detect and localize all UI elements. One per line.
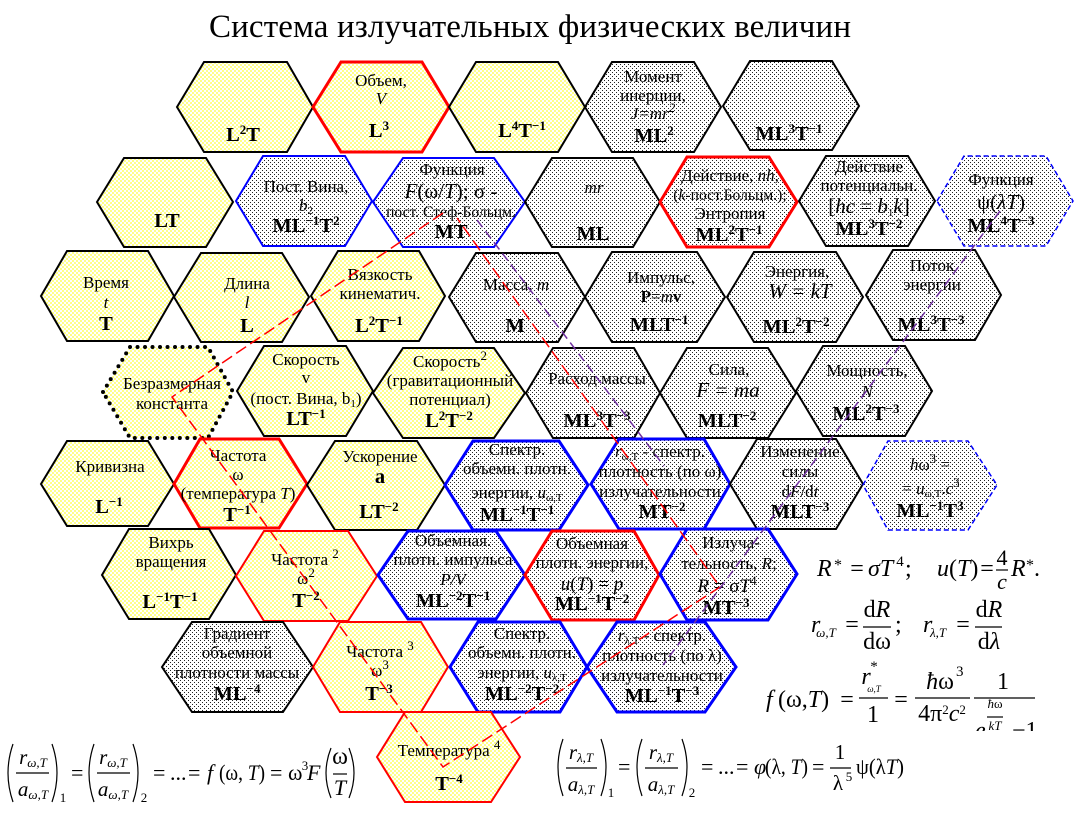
- hexagon: spectral emissivity omega: плотность (по ω): [599, 462, 721, 481]
- formula: Stefan-Boltzmann: *: [834, 557, 842, 574]
- formula: lambda similarity: 1: [835, 740, 845, 764]
- formula: lambda similarity: λ: [833, 771, 844, 795]
- hexagon: frequency: Частота: [210, 446, 267, 465]
- formula: spectral emissivity derivatives: r: [811, 612, 821, 638]
- hexagon: force change: [730, 439, 863, 529]
- formula: Stefan-Boltzmann: [816, 545, 1040, 594]
- hexagon: spectral energy density lambda: энергии, uλ,T: [477, 663, 567, 684]
- hexagon: power: [796, 346, 932, 436]
- hexagon: dimensionless constant: Безразмерная: [123, 374, 221, 393]
- hexagon: time: [41, 251, 174, 341]
- hexagon: dimensionless constant: константа: [136, 394, 208, 413]
- hexagon: velocity squared: [373, 348, 525, 438]
- formula: Planck function: r: [861, 664, 871, 690]
- formula: omega similarity: [8, 744, 354, 805]
- hexagon: volumetric momentum density: ML−2T−1: [416, 588, 490, 612]
- hexagon: spectral energy density omega: энергии, uω,T: [471, 483, 563, 504]
- formula: lambda similarity: rλ,T: [569, 740, 594, 765]
- formula: omega similarity: 3: [302, 758, 308, 773]
- hexagon: function psi: Функция: [968, 170, 1034, 189]
- hexagon: mass density gradient: плотности массы: [175, 663, 300, 682]
- hexagon: time: Время: [83, 273, 129, 292]
- formula: omega similarity: f: [207, 760, 216, 785]
- hexagon: emissivity: R = σT4: [696, 573, 757, 597]
- hexagon: volume: L3: [369, 118, 390, 142]
- hexagon: frequency squared: [236, 531, 377, 621]
- formula: Stefan-Boltzmann: σT: [868, 556, 895, 582]
- formula: spectral emissivity derivatives: r: [923, 612, 933, 638]
- hexagon: frequency squared: ω2: [297, 565, 315, 588]
- hexagon: frequency squared: T−2: [292, 588, 320, 612]
- red dashed cycle line: [172, 213, 720, 767]
- formula: omega similarity: (ω, T): [219, 760, 265, 785]
- formula: lambda similarity: 1: [608, 785, 614, 800]
- hexagon: temperature 4: Температура 4: [398, 737, 501, 760]
- hexagon: ML3T-1: ML3T−1: [755, 121, 823, 145]
- hexagon: dimensionless constant: [103, 347, 233, 438]
- hexagon: potential action: [799, 156, 935, 246]
- hexagon: mass flow: [526, 348, 660, 438]
- formula: Stefan-Boltzmann: R: [816, 556, 832, 582]
- hexagon: action: Действие, nh,: [681, 166, 779, 185]
- hexagon: force change: силы: [782, 462, 819, 481]
- hexagon: action: ML2T−1: [695, 222, 763, 246]
- hexagon: action: [660, 157, 797, 247]
- hexagon: energy flow: Поток: [910, 256, 955, 275]
- hexagon: momentum: MLT−1: [630, 312, 688, 336]
- formula: spectral emissivity derivatives: ω,T: [816, 625, 837, 640]
- hexagon: spectral emissivity lambda: плотность (по λ): [602, 646, 722, 665]
- hexagon: h omega cubed: = uω,T.c3: [902, 475, 960, 500]
- formula: lambda similarity: =: [736, 754, 748, 779]
- formula: Planck function: kT: [988, 718, 1002, 733]
- formula: Planck function: e: [975, 718, 986, 744]
- hexagon: frequency cubed: T−3: [365, 681, 393, 705]
- formula: lambda similarity: aλ,T: [568, 772, 595, 797]
- hexagon: kinematic viscosity: L2T−1: [355, 313, 403, 337]
- hexagon: spectral energy density lambda: Спектр.: [494, 624, 550, 643]
- hexagon: mass flow: Расход массы: [548, 369, 646, 388]
- hexagon: power: N: [860, 382, 874, 401]
- hexagon: vortex: [102, 529, 236, 619]
- hexagon: moment of inertia: [585, 62, 721, 152]
- hexagon: action: (k-пост.Больцм.);: [673, 187, 787, 204]
- hexagon: frequency squared: Частота 2: [271, 546, 339, 569]
- hexagon: spectral emissivity omega: излучательности: [599, 482, 721, 501]
- formula: omega similarity: aω,T: [98, 777, 129, 802]
- hexagon: length: [174, 253, 309, 342]
- hexagon: mass density gradient: объемной: [202, 643, 272, 662]
- hexagon: Wien constant b2: Пост. Вина,: [264, 177, 348, 196]
- hexagon: mass: Масса, m: [483, 275, 549, 294]
- hexagon: volumetric momentum density: P/V: [439, 570, 468, 589]
- hexagon: frequency: [174, 439, 307, 528]
- formula: spectral emissivity derivatives: [811, 597, 1003, 655]
- hexagon: vortex: L−1T−1: [142, 589, 198, 613]
- formula: omega similarity: ...: [170, 760, 186, 785]
- hexagon: volumetric energy density: [525, 531, 659, 620]
- formula: Stefan-Boltzmann: u: [937, 556, 949, 582]
- hexagon: length: Длина: [224, 274, 270, 293]
- hexagon: potential action: Действие: [835, 157, 903, 176]
- formula: lambda similarity: rλ,T: [649, 740, 674, 765]
- formula: lambda similarity: =: [618, 754, 630, 779]
- formula: Planck function: =: [894, 687, 908, 713]
- hexagon: function F: F(ω/T); σ -: [404, 179, 497, 203]
- formula: Stefan-Boltzmann: =: [980, 556, 994, 582]
- formula: lambda similarity: (λ, T): [765, 754, 808, 779]
- formula: spectral emissivity derivatives: =: [845, 612, 859, 638]
- hexagon: mass density gradient: Градиент: [204, 624, 271, 643]
- hexagon: spectral energy density omega: ML−1T−1: [480, 502, 554, 526]
- hexagon: vortex: вращения: [136, 552, 207, 571]
- hexagon: L4T-1: [449, 62, 585, 152]
- hexagon: temperature 4: T−4: [435, 771, 463, 795]
- formula: spectral emissivity derivatives: dλ: [978, 629, 1000, 655]
- hexagon: ML3T-1: [723, 61, 859, 150]
- hexagon: momentum: [585, 252, 725, 342]
- hexagon: volumetric energy density: Объемная: [556, 534, 628, 553]
- hexagon: spectral emissivity omega: rω,T - спектр.: [615, 442, 705, 463]
- hexagon: potential action: ML3T−2: [835, 216, 903, 240]
- hexagon: frequency: T−1: [223, 502, 251, 526]
- formula: omega similarity: =: [71, 760, 83, 785]
- hexagon: volumetric momentum density: Объемная.: [415, 531, 491, 550]
- hexagon: acceleration: [307, 441, 445, 530]
- formula: lambda similarity: =: [701, 754, 713, 779]
- formula: omega similarity: 2: [141, 790, 147, 805]
- hexagon: energy flow: [866, 250, 1001, 340]
- formula: lambda similarity: φ: [754, 754, 766, 779]
- formula: Stefan-Boltzmann: (T): [949, 556, 978, 582]
- hexagon: action: Энтропия: [695, 204, 766, 223]
- hexagon: emissivity: [660, 529, 797, 620]
- purple dashed line from function psi: [663, 211, 1000, 665]
- hexagon: frequency cubed: [313, 622, 448, 712]
- hexagon: spectral emissivity lambda: ML−1T−3: [625, 683, 700, 707]
- hexagon: volumetric energy density: плотн. энергии,: [536, 553, 648, 572]
- hexagon: potential action: [hc = b1k]: [828, 194, 910, 219]
- formula: Stefan-Boltzmann: =: [850, 556, 864, 582]
- hexagon: mr: ML: [576, 223, 610, 245]
- hexagon: acceleration: a: [375, 466, 385, 488]
- hexagon: moment of inertia: ML2: [634, 123, 674, 147]
- formula: lambda similarity: =: [812, 754, 824, 779]
- hexagon: L4T-1: L4T−1: [498, 118, 546, 142]
- hexagon: velocity: (пост. Вина, b1): [250, 389, 362, 410]
- formula: Stefan-Boltzmann: ;: [905, 556, 912, 582]
- hexagon: velocity: Скорость: [272, 350, 340, 369]
- formula: omega similarity: ω: [288, 760, 302, 785]
- hexagon: momentum: Импульс,: [627, 268, 695, 287]
- hexagon: function F: MT: [434, 221, 468, 243]
- formula: Planck function: f: [766, 687, 776, 713]
- hexagon: velocity squared: (гравитационный: [387, 371, 513, 390]
- formula: omega similarity: T: [334, 775, 348, 800]
- hexagon: spectral energy density lambda: ML−2T−2: [485, 681, 559, 705]
- hexagon: volumetric energy density: u(T) = p: [561, 574, 623, 595]
- hexagon: L2T: [177, 62, 313, 152]
- hexagon: mass flow: ML3T−3: [563, 408, 631, 432]
- hexagon: power: ML2T−3: [832, 401, 900, 425]
- hexagon: mr: [525, 158, 660, 247]
- hexagon: mr: mr: [585, 178, 604, 197]
- hexagon: h omega cubed: [863, 441, 997, 530]
- hexagon: energy: ML2T−2: [762, 314, 830, 338]
- hexagon: volumetric momentum density: [378, 531, 525, 619]
- hexagon: function psi: ψ(λT): [977, 190, 1025, 214]
- hexagon: frequency cubed: ω3: [371, 657, 389, 680]
- hexagon: energy flow: энергии: [903, 275, 961, 294]
- formula: Planck function: 3: [956, 664, 964, 680]
- formula: omega similarity: rω,T: [99, 745, 128, 770]
- formula: omega similarity: F: [306, 760, 321, 785]
- hexagon: potential action: потенциальн.: [821, 176, 917, 195]
- hexagon: emissivity: MT−3: [703, 595, 750, 619]
- hexagon: h omega cubed: hω3 =: [910, 451, 950, 474]
- formula: omega similarity: aω,T: [18, 777, 49, 802]
- hexagon: volume: Объем,: [355, 71, 407, 90]
- hexagon: Wien constant b2: [236, 156, 372, 246]
- hexagon: length: l: [245, 293, 250, 312]
- hexagon: moment of inertia: Момент: [624, 67, 682, 86]
- formula: lambda similarity: 2: [689, 785, 695, 800]
- hexagon: kinematic viscosity: кинематич.: [339, 284, 421, 303]
- formula: Planck function: ħω: [926, 669, 954, 695]
- formula: spectral emissivity derivatives: dR: [864, 597, 891, 623]
- hexagon: function F: Функция: [419, 160, 485, 179]
- formula: Planck function: ω,T: [867, 684, 882, 694]
- formula: spectral emissivity derivatives: =: [956, 612, 970, 638]
- formula: spectral emissivity derivatives: dR: [976, 597, 1003, 623]
- hexagon: acceleration: LT−2: [359, 499, 399, 523]
- hexagon: volumetric momentum density: плотн. импульса: [393, 550, 513, 569]
- formula: Planck function: −1: [1012, 718, 1038, 744]
- hexagon: velocity squared: Скорость2: [413, 348, 487, 371]
- hexagon: function F: пост. Стеф-Больцм.: [386, 204, 516, 221]
- hexagon: emissivity: Излуча-: [702, 533, 760, 552]
- hexagon: spectral emissivity lambda: излучательности: [601, 666, 723, 685]
- formula: Stefan-Boltzmann: *: [1026, 557, 1034, 574]
- formula: lambda similarity: [558, 739, 904, 800]
- formula: Planck function: ħω: [987, 696, 1003, 711]
- hexagon: function psi: ML4T−3: [967, 213, 1035, 237]
- hexagon: function F: [373, 158, 525, 247]
- hexagon: mass: [449, 253, 585, 342]
- hexagon: spectral energy density lambda: объемн. плотн.: [468, 643, 576, 662]
- hexagon: temperature 4: [377, 712, 520, 802]
- formula: omega similarity: =: [188, 760, 200, 785]
- hexagon: force: F = ma: [695, 378, 760, 402]
- hexagon: energy: Энергия,: [765, 262, 829, 281]
- formula: omega similarity: ω: [332, 744, 348, 770]
- hexagon: Wien constant b2: b2: [299, 196, 313, 217]
- hexagon: spectral emissivity lambda: rλ,T - спектр.: [618, 626, 706, 647]
- hexagon: moment of inertia: J=mr2: [631, 100, 676, 123]
- formula: omega similarity: =: [153, 760, 165, 785]
- hexagon: L2T: L2T: [226, 122, 260, 146]
- formula: spectral emissivity derivatives: dω: [863, 629, 891, 655]
- hexagon: acceleration: Ускорение: [342, 447, 418, 466]
- purple dashed line from function F: [477, 220, 664, 466]
- hexagon: LT: [97, 158, 233, 247]
- hexagon: moment of inertia: инерции,: [620, 86, 686, 105]
- formula: omega similarity: =: [270, 760, 282, 785]
- hexagon: curvature: Кривизна: [75, 457, 145, 476]
- formula: lambda similarity: aλ,T: [648, 772, 675, 797]
- hexagon: kinematic viscosity: Вязкость: [348, 265, 413, 284]
- hexagon: energy flow: ML3T−3: [897, 312, 965, 336]
- hexagon: volume: V: [376, 89, 389, 108]
- formula: lambda similarity: ...: [718, 754, 734, 779]
- hexagon: velocity: LT−1: [286, 406, 326, 430]
- hexagon: energy: W = kT: [768, 279, 833, 303]
- formula: spectral emissivity derivatives: ;: [895, 612, 902, 638]
- formula: Planck function: 1: [997, 669, 1009, 695]
- hexagon: spectral energy density omega: Спектр.: [489, 440, 545, 459]
- hexagon: momentum: P=mv: [641, 287, 682, 306]
- hexagon: function psi: [937, 156, 1073, 246]
- hexagon: volume: [313, 62, 449, 152]
- formula: omega similarity: 1: [60, 790, 66, 805]
- hexagon: spectral emissivity omega: [591, 439, 730, 529]
- hexagon: force: Сила,: [709, 360, 749, 379]
- hexagon: curvature: L−1: [95, 494, 123, 518]
- hexagon: velocity squared: потенциал): [409, 390, 491, 409]
- hexagon: force change: MLT−3: [771, 499, 830, 523]
- hexagon: force: MLT−2: [698, 408, 756, 432]
- hexagon: length: L: [240, 315, 254, 337]
- hexagon: frequency: (температура T): [181, 484, 295, 503]
- formula: Stefan-Boltzmann: 4: [896, 554, 904, 570]
- hexagon: spectral energy density omega: [445, 440, 588, 530]
- formula: Stefan-Boltzmann: 4: [996, 545, 1008, 570]
- hexagon: mass density gradient: ML−4: [214, 681, 261, 705]
- formula: omega similarity: rω,T: [19, 745, 48, 770]
- title: Система излучательных физических величин: [209, 9, 851, 45]
- hexagon: vortex: Вихрь: [148, 533, 194, 552]
- formula: lambda similarity: ψ(λT): [856, 754, 904, 779]
- hexagon: spectral emissivity omega: MT−2: [639, 499, 685, 523]
- hexagon: mass density gradient: [162, 622, 313, 712]
- hexagon: force change: Изменение: [760, 442, 840, 461]
- formula: lambda similarity: 5: [846, 769, 852, 784]
- hexagon: LT: LT: [154, 210, 180, 232]
- formula: Planck function: 4π2c2: [918, 701, 966, 727]
- hexagon: force change: dF/dt: [782, 482, 820, 501]
- formula: Stefan-Boltzmann: c: [997, 569, 1007, 594]
- hexagon: kinematic viscosity: [311, 251, 445, 341]
- hexagon: velocity: [237, 346, 373, 436]
- formula: Planck function: 1: [867, 702, 879, 728]
- hexagon: mass: M: [505, 315, 525, 337]
- formula: Planck function: [766, 662, 1035, 731]
- formula: Planck function: *: [870, 659, 878, 675]
- formula: Planck function: =: [840, 687, 854, 713]
- hexagon: spectral emissivity lambda: [587, 622, 736, 712]
- formula: spectral emissivity derivatives: λ,T: [929, 625, 947, 640]
- hexagon: power: Мощность,: [826, 361, 908, 380]
- hexagon: frequency: ω: [232, 465, 244, 484]
- hexagon: velocity: v: [302, 368, 311, 387]
- hexagon: spectral energy density lambda: [450, 622, 587, 712]
- hexagon: energy: [727, 252, 863, 342]
- hexagon: velocity squared: L2T−2: [425, 408, 473, 432]
- formula: Stefan-Boltzmann: .: [1034, 556, 1040, 582]
- hexagon: spectral energy density omega: объемн. плотн.: [463, 459, 571, 478]
- formula: Planck function: (ω,T): [778, 687, 829, 713]
- hexagon: h omega cubed: ML−1T3: [896, 498, 964, 522]
- hexagon: Wien constant b2: ML−1T2: [272, 213, 340, 237]
- hexagon: curvature: [41, 441, 174, 526]
- hexagon: time: t: [104, 293, 110, 312]
- hexagon: force: [660, 348, 796, 438]
- formula: Stefan-Boltzmann: R: [1010, 556, 1026, 582]
- hexagon: frequency cubed: Частота 3: [346, 638, 414, 661]
- hexagon: emissivity: тельность, R;: [681, 554, 777, 573]
- hexagon: time: T: [99, 313, 113, 335]
- hexagon: volumetric energy density: ML−1T−2: [555, 591, 629, 615]
